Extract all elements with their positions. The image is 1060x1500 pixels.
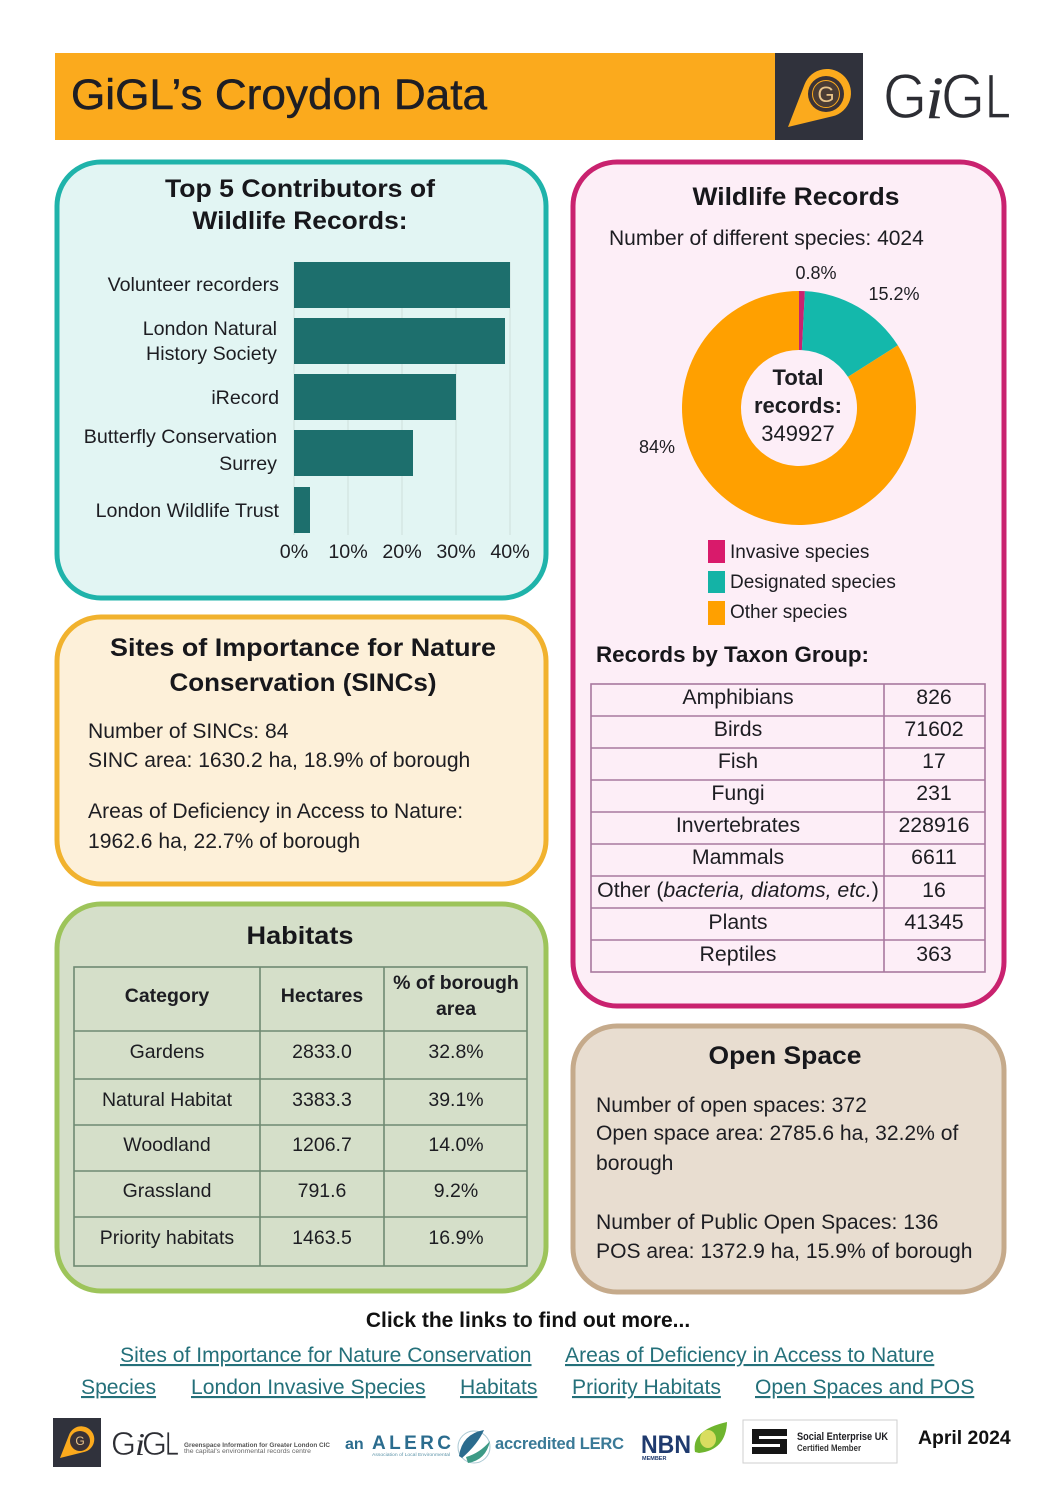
links list: Priority Habitats: [572, 1376, 721, 1399]
icon: GiGL map pin logo: G: [817, 82, 835, 107]
table: taxon groups: Amphibians: [682, 685, 794, 709]
legend: Invasive species: [730, 542, 869, 563]
heading: open space: Open Space: [708, 1042, 862, 1070]
table: habitats: 1206.7: [292, 1134, 352, 1156]
table: taxon groups: Fungi: [711, 781, 765, 805]
donut chart: records by species type: 15.2%: [868, 284, 920, 304]
table: habitats: 14.0%: [428, 1134, 484, 1156]
table: taxon groups: 363: [916, 942, 952, 966]
panel: wildlife records: [573, 162, 1004, 1006]
table: habitats: 16.9%: [428, 1227, 484, 1249]
table: taxon groups: Other (bacteria, diatoms, etc.): [597, 878, 879, 902]
text block: SINC figures: Number of SINCs: 84: [88, 720, 289, 743]
title: GiGL’s Croydon Data: [71, 71, 487, 119]
table: taxon groups: Plants: [708, 910, 768, 934]
table: habitats: % of borough: [393, 972, 519, 994]
panel: SINCs: [57, 617, 546, 884]
table: habitats: 39.1%: [428, 1089, 484, 1111]
donut chart: records by species type: 349927: [761, 421, 835, 446]
icon: GiGL footer logo: i: [135, 1426, 145, 1462]
bar chart: contributors: 20%: [382, 541, 422, 563]
table: habitats: 32.8%: [428, 1041, 484, 1063]
table: taxon groups: 826: [916, 685, 952, 709]
table: habitats: Grassland: [123, 1180, 211, 1202]
logo: ALERC accredited LERC: ALERC: [372, 1433, 451, 1454]
logo: ALERC accredited LERC: Association of Local Environmental: [372, 1452, 450, 1457]
table: taxon groups: 17: [922, 749, 946, 773]
panel: top 5 contributors: [57, 162, 546, 598]
links list: Species: [81, 1376, 156, 1399]
table: habitats: 2833.0: [292, 1041, 352, 1063]
GiGL wordmark: i: [925, 65, 944, 131]
text block: SINC figures: 1962.6 ha, 22.7% of borough: [88, 830, 360, 853]
icon: GiGL footer logo: Greenspace Information for Greater London CIC: [184, 1443, 331, 1449]
table: habitats: 9.2%: [434, 1180, 478, 1202]
text block: SINC figures: [88, 720, 470, 853]
links list: Sites of Importance for Nature Conservation: [120, 1344, 532, 1367]
donut chart: records by species type: [639, 263, 920, 525]
bar chart: contributors: [84, 262, 530, 563]
bar chart: contributors: Surrey: [219, 453, 277, 475]
icon: GiGL footer logo: G: [111, 1425, 136, 1462]
table: taxon groups: Mammals: [692, 845, 784, 869]
donut chart: records by species type: 0.8%: [795, 263, 837, 283]
bar chart: contributors: 10%: [328, 541, 368, 563]
footer logos: [53, 1418, 1011, 1467]
table: habitats: Priority habitats: [100, 1227, 234, 1249]
bar chart: contributors: 30%: [436, 541, 476, 563]
table: habitats: Hectares: [281, 985, 363, 1007]
heading: SINCs: Conservation (SINCs): [170, 669, 436, 697]
panel: open space: [573, 1026, 1004, 1292]
bar chart: contributors: London Natural: [143, 318, 277, 340]
table: taxon groups: Invertebrates: [676, 813, 800, 837]
table: habitats: 3383.3: [292, 1089, 352, 1111]
logo: NBN member: MEMBER: [642, 1456, 666, 1462]
table: habitats: area: [436, 998, 476, 1020]
table: habitats: Natural Habitat: [102, 1089, 233, 1111]
table: taxon groups: 228916: [898, 813, 970, 837]
text: number of species: Number of different species: 4024: [609, 227, 924, 250]
table: habitats: Category: [125, 985, 209, 1007]
bar chart: contributors: iRecord: [211, 387, 279, 409]
table: taxon groups: 71602: [904, 717, 964, 741]
logo: Social Enterprise UK: Certified Member: [797, 1443, 861, 1454]
logo: NBN member: NBN: [641, 1431, 691, 1459]
donut chart: records by species type: Total: [773, 365, 823, 390]
text block: SINC figures: SINC area: 1630.2 ha, 18.9% of borough: [88, 749, 470, 772]
logo: ALERC accredited LERC: [345, 1430, 624, 1463]
text block: open space figures: POS area: 1372.9 ha, 15.9% of borough: [596, 1240, 972, 1263]
date: April 2024: [918, 1427, 1011, 1449]
logo: ALERC accredited LERC: an: [345, 1436, 364, 1453]
table: habitats: 1463.5: [292, 1227, 352, 1249]
links list: Open Spaces and POS: [755, 1376, 974, 1399]
text block: open space figures: Open space area: 2785.6 ha, 32.2% of: [596, 1122, 959, 1145]
legend: [708, 540, 896, 625]
GiGL wordmark: G: [941, 62, 985, 132]
links list: London Invasive Species: [191, 1376, 426, 1399]
logo: NBN member: [641, 1422, 727, 1462]
heading: top 5 contributors: [165, 175, 436, 235]
bar chart: contributors: 0%: [280, 541, 308, 563]
bar chart: contributors: London Wildlife Trust: [96, 500, 280, 522]
links list: Habitats: [460, 1376, 537, 1399]
links heading: Click the links to find out more...: [366, 1309, 690, 1332]
text block: open space figures: [596, 1094, 972, 1263]
icon: GiGL footer logo: G: [75, 1434, 85, 1448]
links list: Areas of Deficiency in Access to Nature: [565, 1344, 934, 1367]
header banner: [55, 53, 775, 140]
table: taxon groups: Reptiles: [700, 942, 776, 966]
table: habitats: Gardens: [130, 1041, 205, 1063]
table: taxon groups: 231: [916, 781, 952, 805]
logo: Social Enterprise UK: [743, 1420, 897, 1463]
donut chart: records by species type: records:: [754, 393, 842, 418]
bar chart: contributors: 40%: [490, 541, 530, 563]
table: taxon groups: 41345: [904, 910, 964, 934]
heading: top 5 contributors: Wildlife Records:: [192, 207, 408, 235]
GiGL wordmark: [883, 62, 1011, 132]
icon: GiGL map pin logo: [775, 53, 863, 140]
links list: [81, 1344, 974, 1399]
text block: open space figures: Number of open spaces: 372: [596, 1094, 867, 1117]
legend: Other species: [730, 602, 847, 623]
logo: Social Enterprise UK: Social Enterprise UK: [797, 1431, 888, 1443]
heading: top 5 contributors: Top 5 Contributors of: [165, 175, 436, 203]
legend: Designated species: [730, 572, 896, 593]
bar chart: contributors: Butterfly Conservation: [84, 426, 277, 448]
icon: GiGL footer logo: G: [142, 1425, 167, 1462]
logo: ALERC accredited LERC: accredited LERC: [495, 1435, 624, 1453]
heading: SINCs: Sites of Importance for Nature: [110, 634, 496, 662]
icon: GiGL footer logo: the capital's environmental records centre: [184, 1449, 312, 1455]
panel: habitats: [57, 904, 546, 1291]
bar chart: contributors: Volunteer recorders: [108, 274, 279, 296]
text block: SINC figures: Areas of Deficiency in Access to Nature:: [88, 800, 463, 823]
table: taxon groups: 16: [922, 878, 946, 902]
table: habitats: 791.6: [298, 1180, 346, 1202]
text block: open space figures: borough: [596, 1152, 673, 1175]
icon: GiGL footer logo: L: [165, 1425, 179, 1462]
table: habitats: Woodland: [123, 1134, 211, 1156]
GiGL wordmark: L: [985, 62, 1011, 132]
heading: wildlife records: Wildlife Records: [692, 183, 900, 211]
heading: habitats: Habitats: [246, 922, 354, 950]
GiGL wordmark: G: [883, 62, 927, 132]
links section: [81, 1309, 974, 1399]
table: habitats: [74, 967, 527, 1266]
icon: GiGL footer logo: [53, 1418, 331, 1467]
bar chart: contributors: History Society: [146, 343, 277, 365]
table: taxon groups: [591, 684, 985, 972]
table: taxon groups: 6611: [911, 845, 957, 869]
heading: SINCs: [110, 634, 496, 697]
heading: records by taxon group: Records by Taxon Group:: [596, 642, 869, 667]
table: taxon groups: Fish: [718, 749, 758, 773]
text block: open space figures: Number of Public Open Spaces: 136: [596, 1211, 938, 1234]
table: taxon groups: Birds: [714, 717, 762, 741]
donut chart: records by species type: 84%: [639, 437, 675, 457]
